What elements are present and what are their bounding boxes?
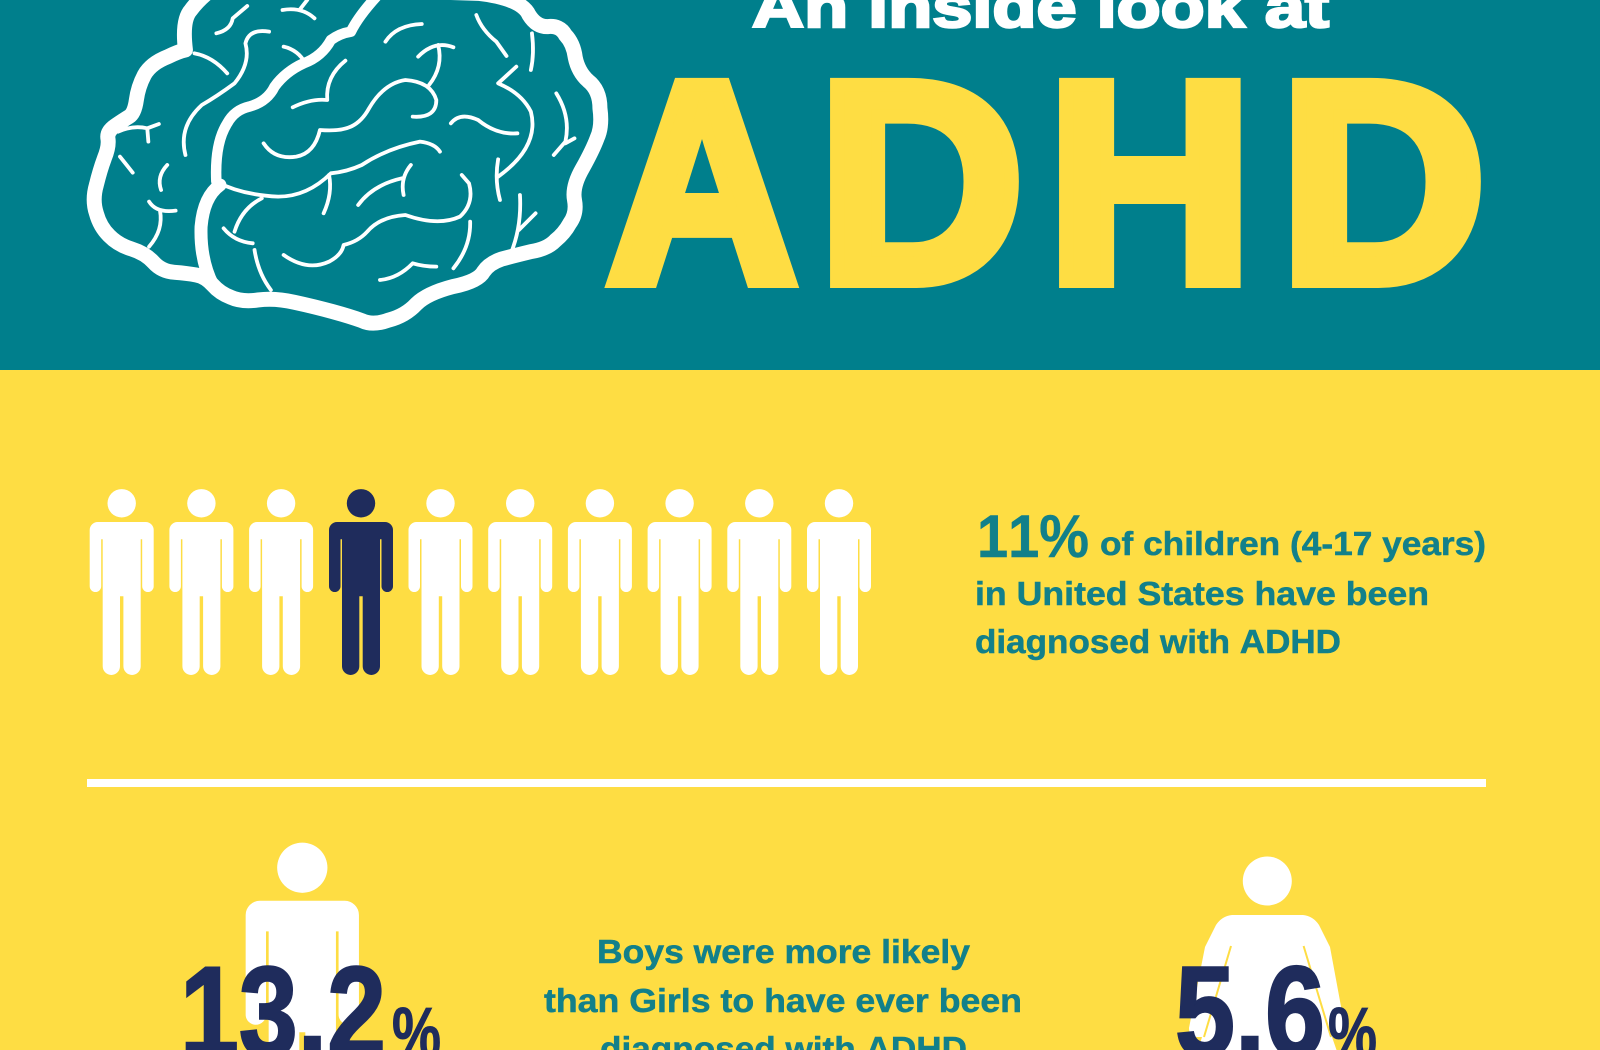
- line 1: of children (4-17 years): [1100, 525, 1486, 562]
- brain outer outline: [94, 0, 601, 323]
- person 8: [648, 489, 712, 675]
- icon: girl: [1189, 856, 1345, 1050]
- girl head: [1243, 856, 1292, 906]
- icon: brain: [94, 0, 601, 323]
- girl arm gaps: [1204, 946, 1331, 1037]
- line 2: than Girls to have ever been: [544, 982, 1022, 1019]
- person 7: [568, 489, 632, 675]
- title: ADHD: A: [607, 24, 797, 342]
- icon: boy: [246, 843, 359, 1050]
- person 1: [90, 489, 154, 675]
- person 4 highlighted: [329, 489, 393, 675]
- icon array: 1 in 10 children: [90, 489, 871, 675]
- stat: 11% of children: [975, 503, 1486, 660]
- title: ADHD: H: [1047, 24, 1253, 342]
- title: ADHD: D: [818, 24, 1024, 342]
- figure: 11%: 11%: [977, 503, 1089, 570]
- person 2: [169, 489, 233, 675]
- stat: boys 13.2%: [180, 941, 441, 1050]
- person 3: [249, 489, 313, 675]
- divider: [87, 779, 1486, 787]
- line 1: Boys were more likely: [597, 933, 971, 970]
- line 2: in United States have been: [975, 575, 1429, 612]
- title: ADHD: D: [1280, 24, 1486, 342]
- person 6: [488, 489, 552, 675]
- stat: girls 5.6%: [1175, 941, 1377, 1050]
- brain lower lobe contour: [201, 185, 220, 285]
- person 5: [408, 489, 472, 675]
- person 9: [727, 489, 791, 675]
- brain front lobe contour: [216, 0, 376, 182]
- brain fold lines: [118, 0, 574, 290]
- person 10: [807, 489, 871, 675]
- line 3: diagnosed with ADHD: [975, 623, 1341, 660]
- girl body: [1189, 915, 1345, 1050]
- header band: [0, 0, 1600, 370]
- comparison text: [544, 933, 1022, 1050]
